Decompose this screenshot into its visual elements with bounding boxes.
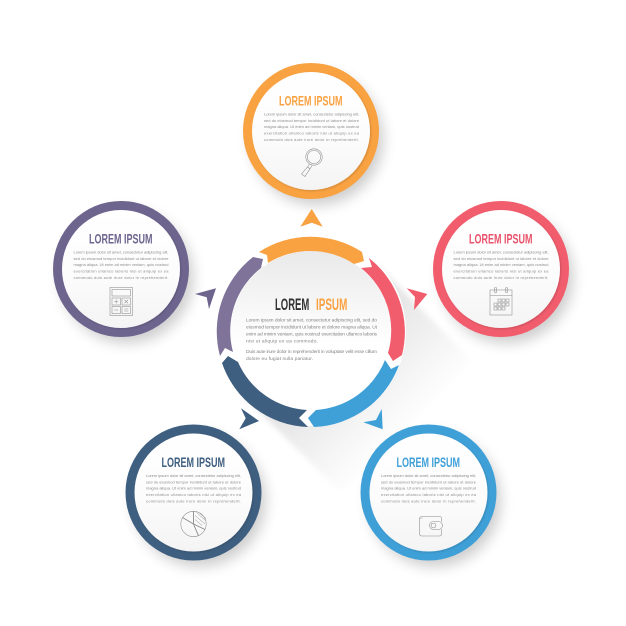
segment: blue	[308, 360, 399, 427]
text block: magna aliqua. Ut enim ad minim veniam, quis nostrud	[454, 262, 548, 267]
segment: purple	[217, 257, 263, 356]
segment: navy	[222, 356, 308, 427]
text block: magna aliqua. Ut enim ad minim veniam, quis nostrud	[146, 486, 241, 491]
icon: magnifier	[302, 149, 322, 176]
segment: red	[361, 258, 405, 361]
arrow: top	[300, 209, 323, 227]
heading: LOREM IPSUM	[89, 230, 152, 246]
text block: exercitation ullamco laboris nisi ut aliquip ex ea	[454, 268, 549, 274]
centre text block: Lorem ipsum dolor sit amet, consectetur adipiscing elit, sed do	[246, 318, 377, 324]
panel: centre ring	[216, 236, 406, 427]
text block: magna aliqua. Ut enim ad minim veniam, quis nostrud	[264, 124, 359, 129]
heading: LOREM IPSUM	[396, 454, 460, 470]
text block: magna aliqua. Ut enim ad minim veniam, quis nostrud	[381, 486, 476, 491]
text block: sed do eiusmod tempor incididunt ut labore et dolore	[264, 118, 360, 123]
centre heading: IPSUM	[316, 295, 347, 314]
panel: bottom-left navy circle	[126, 424, 266, 566]
panel: bottom-right blue circle	[360, 424, 500, 566]
arrow: lower right	[363, 409, 383, 429]
text block: commodo duis aute irure dolor in reprehenderit.	[381, 498, 476, 503]
arrow: left	[195, 288, 216, 309]
text block: exercitation ullamco laboris nisi ut aliquip ex ea	[74, 268, 169, 274]
text block: sed do eiusmod tempor incididunt ut labore et dolore	[454, 256, 549, 261]
text block: Lorem ipsum dolor sit amet, consectetur adipiscing elit,	[264, 112, 359, 117]
icon: calendar	[490, 288, 512, 315]
text block	[264, 112, 360, 142]
text block: commodo duis aute irure dolor in reprehenderit.	[146, 498, 241, 503]
centre text block: nisi ut aliquip ex ea commodo.	[246, 339, 318, 345]
centre text block: Duis aute irure dolor in reprehenderit in voluptate velit esse cillum	[246, 349, 377, 355]
centre text block: dolore eu fugiat nulla pariatur.	[246, 356, 313, 362]
heading: LOREM IPSUM	[279, 92, 342, 108]
centre heading: LOREM	[275, 295, 309, 314]
text block	[74, 250, 169, 280]
text block: exercitation ullamco laboris nisi ut aliquip ex ea	[381, 492, 477, 497]
centre text block: eiusmod tempor incididunt ut labore et dolore magna aliqua. Ut	[246, 325, 378, 331]
text block: commodo duis aute irure dolor in reprehenderit.	[74, 275, 168, 280]
icon: wallet	[420, 516, 442, 536]
text block: Lorem ipsum dolor sit amet, consectetur adipiscing elit,	[454, 250, 548, 255]
text block: commodo duis aute irure dolor in reprehenderit.	[264, 137, 359, 142]
text block	[146, 473, 242, 503]
panel: right red circle	[433, 201, 573, 343]
text block: sed do eiusmod tempor incididunt ut labore et dolore	[381, 480, 477, 484]
icon: pie chart	[181, 511, 206, 537]
text block: magna aliqua. Ut enim ad minim veniam, quis nostrud	[74, 262, 168, 267]
text block: sed do eiusmod tempor incididunt ut labore et dolore	[146, 480, 242, 484]
text block: Lorem ipsum dolor sit amet, consectetur adipiscing elit,	[74, 250, 168, 255]
segment: orange	[259, 237, 364, 264]
text block: Lorem ipsum dolor sit amet, consectetur adipiscing elit,	[381, 473, 476, 478]
long shadow of centre ring	[245, 265, 480, 500]
panel: left purple circle	[53, 201, 193, 343]
icon: calculator	[110, 288, 132, 316]
centre text block	[246, 318, 378, 362]
text block: commodo duis aute irure dolor in reprehenderit.	[454, 275, 548, 280]
arrow: right	[407, 288, 427, 310]
centre text block: enim ad minim veniam, quis nostrud exercitation ullamco laboris	[246, 332, 378, 338]
text block: exercitation ullamco laboris nisi ut aliquip ex ea	[146, 492, 242, 497]
panel: top orange circle	[243, 63, 383, 205]
arrow: lower left	[239, 408, 259, 429]
text block: exercitation ullamco laboris nisi ut aliquip ex ea	[264, 130, 360, 136]
text block: sed do eiusmod tempor incididunt ut labore et dolore	[74, 256, 169, 261]
heading: LOREM IPSUM	[162, 454, 225, 470]
text block	[381, 473, 477, 503]
text block	[454, 250, 549, 280]
heading: LOREM IPSUM	[469, 230, 532, 246]
text block: Lorem ipsum dolor sit amet, consectetur adipiscing elit,	[146, 473, 241, 478]
